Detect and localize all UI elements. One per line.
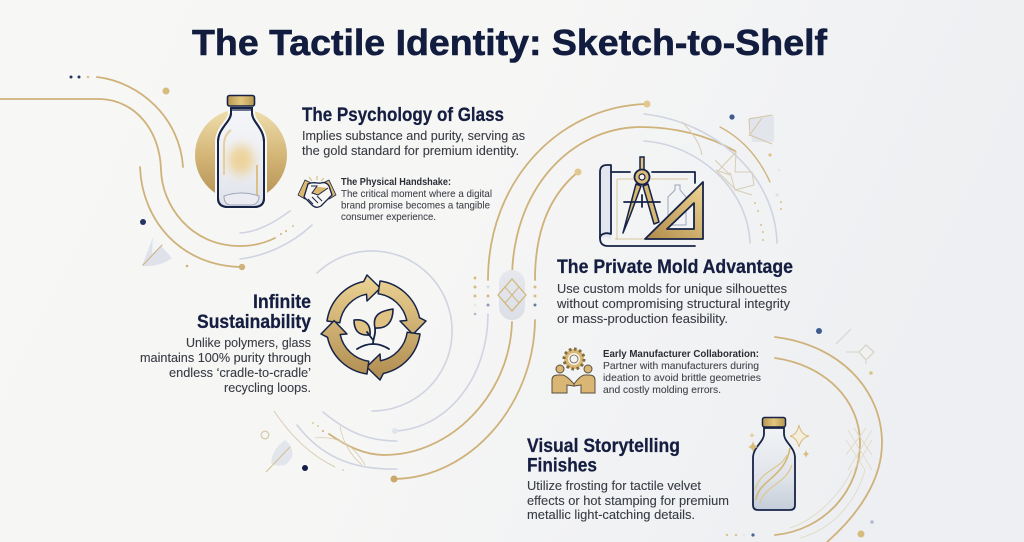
text: Early Manufacturer Collaboration: and costly molding errors. [603,384,721,396]
text: The Physical Handshake: The Physical Handshake: [341,176,451,188]
text: private mold description: Use custom molds for unique silhouettes [557,281,787,296]
text: The Physical Handshake: consumer experience. [341,211,436,223]
text: Early Manufacturer Collaboration: ideation to avoid brittle geometries [603,372,761,384]
text: psychology of glass description: the gold standard for premium identity. [302,143,519,158]
text: The Physical Handshake [341,176,492,223]
flowing connector lines: upper left [0,76,312,270]
text: The Physical Handshake: The critical moment where a digital [341,188,492,200]
decorative lines: lower right [718,328,882,542]
heading: Infinite Sustainability [197,291,311,333]
decorative lines: lower left [261,411,397,472]
text: psychology of glass description [302,128,525,158]
heading: Visual Storytelling Finishes: Finishes [527,454,597,476]
text: sustainability description: endless ‘cradle-to-cradle’ [169,365,311,380]
text: private mold description: or mass-production feasibility. [557,311,728,326]
icon: gear and collaborating manufacturers [552,349,595,393]
text: sustainability description [140,335,311,395]
text: sustainability description: Unlike polymers, glass [186,335,311,350]
text: The Physical Handshake: brand promise becomes a tangible [341,200,490,212]
text: Early Manufacturer Collaboration: Early Manufacturer Collaboration: [603,348,759,360]
text: visual storytelling description [527,478,729,522]
decorative lines: upper right [644,114,782,243]
heading: The Psychology of Glass: The Psychology of Glass [302,104,504,126]
heading: Visual Storytelling Finishes [527,435,680,476]
icon: recycling loop with sprout [321,275,426,380]
text: sustainability description: maintains 100% purity through [140,350,311,365]
text: private mold description [556,281,790,326]
text: visual storytelling description: effects or hot stamping for premium [527,493,729,508]
text: psychology of glass description: Implies substance and purity, serving as [302,128,525,143]
icon: blueprint with compass and set square [600,157,703,246]
heading: Infinite Sustainability: Sustainability [197,311,311,333]
text: Early Manufacturer Collaboration: Partner with manufacturers during [603,360,759,372]
flowing connector lines: central arcs [317,100,735,482]
heading: Visual Storytelling Finishes: Visual Storytelling [527,435,680,457]
text: private mold description: without compromising structural integrity [556,296,790,311]
text: visual storytelling description: metallic light-catching details. [527,507,695,522]
text: Early Manufacturer Collaboration [603,348,761,396]
central diamond node [498,270,526,320]
icon: glass bottle with gold circle [195,96,287,207]
icon: frosted bottle with sparkles [748,418,809,510]
icon: handshake [298,176,336,207]
title: The Tactile Identity: Sketch-to-Shelf [192,22,828,63]
heading: Infinite Sustainability: Infinite [253,291,311,313]
heading: The Private Mold Advantage: The Private Mold Advantage [557,256,793,278]
text: sustainability description: recycling loops. [224,380,311,395]
text: visual storytelling description: Utilize frosting for tactile velvet [527,478,701,493]
